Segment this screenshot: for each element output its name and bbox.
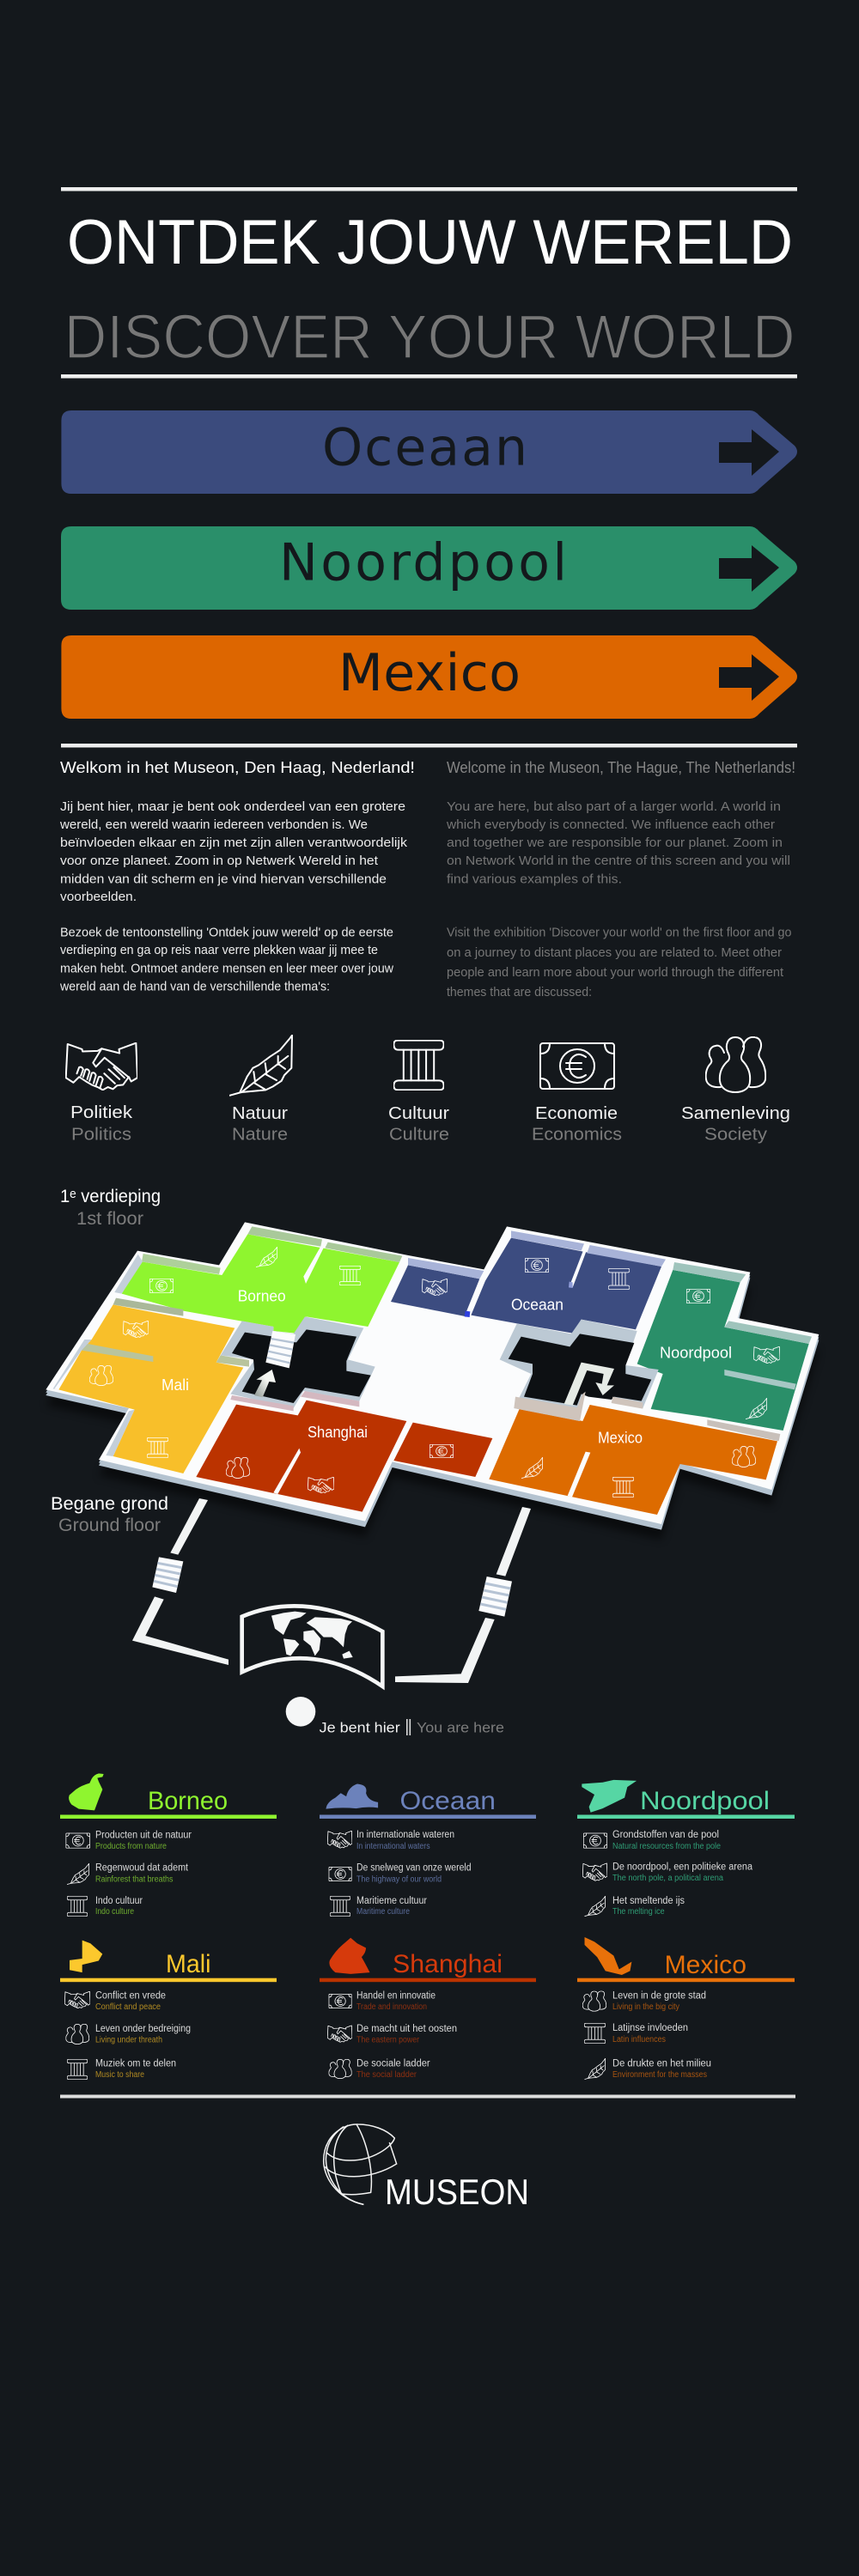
panel: Borneo: Regenwoud dat ademt [95, 1863, 189, 1874]
header block [61, 187, 797, 378]
logo: Museon [324, 2124, 529, 2212]
intro text Dutch: midden van dit scherm en je vind hiervan verschillende [60, 872, 387, 886]
ground floor route and map [132, 1498, 531, 1686]
theme: Economie: Economie [535, 1104, 618, 1123]
panel: Shanghai: De sociale ladder [356, 2058, 430, 2069]
you are here label: Je bent hier [320, 1720, 400, 1736]
panel: Shanghai: Trade and innovation [356, 2002, 427, 2012]
sign: Oceaan: Oceaan [322, 418, 527, 478]
room labels: Noordpool [660, 1345, 732, 1362]
panel: Shanghai [320, 1938, 536, 2080]
east route [395, 1507, 531, 1683]
panel: Shanghai: Shanghai [393, 1950, 503, 1978]
panel: Noordpool [577, 1780, 795, 1917]
theme: Natuur [230, 1036, 292, 1145]
panel: Noordpool: Het smeltende ijs [612, 1896, 685, 1906]
you are here label: You are here [417, 1720, 504, 1736]
silhouette: Noordpool [582, 1780, 637, 1813]
theme: Politiek: Politics [71, 1126, 131, 1145]
intro text Dutch: Jij bent hier, maar je bent ook onderdeel van een grotere [60, 799, 405, 814]
intro text English: find various examples of this. [447, 872, 622, 886]
panel: Mali: Mali [166, 1950, 211, 1978]
room: Shanghai east [393, 1423, 492, 1477]
arrow icon [719, 429, 779, 476]
intro text English: Welcome in the Museon, The Hague, The Netherlands! [447, 759, 795, 776]
sign: Mexico [61, 635, 797, 719]
panel: Borneo: Indo culture [95, 1907, 134, 1917]
room: Mexico [489, 1405, 777, 1515]
intro text Dutch: voorbeelden. [60, 890, 137, 904]
panel: Mexico: De drukte en het milieu [612, 2058, 711, 2069]
panel: Shanghai: Handel en innovatie [356, 1990, 436, 2001]
west route [132, 1498, 228, 1665]
panel: Borneo: Rainforest that breaths [95, 1874, 174, 1884]
intro text Dutch: maken hebt. Ontmoet andere mensen en leer meer over jouw [60, 962, 393, 976]
room labels [161, 1288, 732, 1447]
you are here label [320, 1719, 504, 1736]
sign: Oceaan [61, 410, 797, 494]
silhouette: Shanghai [329, 1938, 370, 1974]
panel: Mexico [577, 1937, 795, 2080]
intro text Dutch: voor onze planeet. Zoom in op Netwerk Wereld in het [60, 854, 379, 868]
label: ground floor [51, 1494, 168, 1535]
panel: Oceaan: The highway of our world [356, 1874, 442, 1884]
silhouette: Mexico [585, 1937, 631, 1975]
panel: Mali: Conflict and peace [95, 2002, 161, 2012]
panel: Noordpool: Grondstoffen van de pool [612, 1830, 719, 1840]
intro text Dutch: Bezoek de tentoonstelling 'Ontdek jouw wereld' op de eerste [60, 926, 393, 939]
title English: DISCOVER YOUR WORLD [64, 303, 795, 372]
panel: Oceaan: In internationale wateren [356, 1830, 454, 1840]
intro text Dutch: wereld aan de hand van de verschillende thema's: [59, 979, 330, 994]
panel: Oceaan: In international waters [356, 1842, 430, 1851]
panel: Shanghai: De macht uit het oosten [356, 2024, 457, 2034]
arrow icon [719, 654, 779, 701]
panel: Borneo: Products from nature [95, 1842, 167, 1851]
panel: Mexico: Environment for the masses [612, 2070, 707, 2080]
intro text English: on Network World in the centre of this screen and you will [447, 854, 790, 868]
panel: Oceaan [320, 1783, 536, 1917]
room labels: Oceaan [511, 1297, 564, 1314]
panel: Oceaan: Oceaan [400, 1787, 496, 1815]
panel: Borneo [60, 1773, 277, 1917]
stairs [265, 1331, 295, 1368]
stairwell west [216, 1316, 375, 1411]
theme: Cultuur [388, 1041, 449, 1145]
theme: Natuur: Nature [232, 1126, 288, 1145]
silhouette: Mali [70, 1941, 102, 1972]
panel: Noordpool: De noordpool, een politieke arena [612, 1862, 753, 1872]
panel: Shanghai: The eastern power [356, 2036, 420, 2045]
intro text Dutch [59, 759, 415, 994]
floor plan: first floor [46, 1222, 819, 1540]
label: first floor: 1st floor [76, 1209, 143, 1229]
intro text English: Visit the exhibition 'Discover your world' on the first floor and go [447, 926, 792, 939]
panel: Noordpool: Natural resources from the pole [612, 1842, 721, 1851]
room: Shanghai [196, 1400, 406, 1512]
theme: Cultuur: Cultuur [388, 1104, 449, 1123]
intro text English: people and learn more about your world through the different [447, 965, 784, 980]
intro text Dutch: Welkom in het Museon, Den Haag, Nederland! [60, 759, 415, 776]
interior wall faces [53, 1226, 812, 1497]
panel: Mali: Music to share [95, 2070, 144, 2080]
theme: Cultuur: Culture [389, 1126, 449, 1145]
panel: Mexico: Leven in de grote stad [612, 1990, 706, 2001]
theme: Natuur: Natuur [232, 1104, 288, 1123]
room: Oceaan west [391, 1265, 479, 1316]
intro text Dutch: beïnvloeden elkaar en zijn met zijn allen verantwoordelijk [60, 835, 408, 850]
logo: Museon: MUSEON [385, 2172, 529, 2212]
intro text Dutch: wereld, een wereld waarin iedereen verbonden is. We [59, 817, 368, 832]
panel: Mali: Leven onder bedreiging [95, 2024, 191, 2034]
room labels: Shanghai [308, 1424, 368, 1441]
intro text English [446, 759, 795, 999]
stairwell east [500, 1320, 659, 1421]
panel: Noordpool: Noordpool [640, 1787, 770, 1815]
silhouette: Borneo [69, 1773, 104, 1810]
sign: Noordpool: Noordpool [279, 532, 567, 592]
panel: Mexico: Latijnse invloeden [612, 2023, 688, 2033]
sign: Noordpool [61, 526, 797, 610]
theme: Politiek [66, 1043, 137, 1145]
panel: Mali: Living under threath [95, 2036, 162, 2045]
intro text English: on a journey to distant places you are related to. Meet other [447, 945, 782, 960]
theme: Economie: Economics [532, 1126, 622, 1145]
label: ground floor: Ground floor [58, 1516, 161, 1535]
intro text English: and together we are responsible for our planet. Zoom in [447, 835, 783, 850]
panel: Oceaan: Maritime culture [356, 1907, 410, 1917]
theme: Politiek: Politiek [70, 1103, 133, 1122]
you are here marker [286, 1697, 315, 1727]
panel: Borneo: Indo cultuur [95, 1896, 143, 1906]
arrow route [564, 1363, 614, 1406]
sign: Mexico: Mexico [338, 643, 521, 703]
room: Noordpool [637, 1270, 809, 1431]
room labels: Mexico [598, 1430, 643, 1447]
panel: Mexico: Living in the big city [612, 2002, 679, 2012]
room: Borneo [122, 1234, 399, 1334]
panel: Mali: Conflict en vrede [95, 1990, 166, 2001]
panel: Mali: Muziek om te delen [95, 2058, 176, 2069]
intro text English: themes that are discussed: [447, 985, 592, 999]
theme: Samenleving: Samenleving [681, 1104, 790, 1123]
world map screen [242, 1606, 382, 1686]
panel: Oceaan: De snelweg van onze wereld [356, 1863, 471, 1874]
panel: Noordpool: The melting ice [612, 1907, 665, 1917]
room labels: Mali [161, 1376, 189, 1394]
room: Oceaan [471, 1238, 661, 1334]
panel: Borneo: Producten uit de natuur [95, 1831, 192, 1841]
label: first floor: 1ᵉ verdieping [60, 1187, 161, 1206]
globe [324, 2124, 397, 2204]
panel: Oceaan: Maritieme cultuur [356, 1896, 427, 1906]
silhouette: wave [326, 1783, 378, 1809]
title Dutch: ONTDEK JOUW WERELD [67, 208, 793, 277]
arrow icon [719, 545, 779, 592]
panel: Borneo: Borneo [148, 1787, 228, 1815]
label: ground floor: Begane grond [51, 1494, 168, 1514]
theme: Samenleving [681, 1037, 790, 1145]
panel: Shanghai: The social ladder [356, 2070, 417, 2080]
panel: Noordpool: The north pole, a political arena [612, 1874, 723, 1883]
intro text Dutch: verdieping en ga op reis naar verre plekken waar jij mee te [60, 943, 378, 957]
room: Mali [58, 1304, 243, 1473]
panel: Mali [60, 1941, 277, 2080]
label: first floor [60, 1187, 161, 1229]
arrow up [254, 1370, 276, 1397]
room icons [89, 1247, 780, 1498]
room labels: Borneo [238, 1288, 286, 1305]
theme: Samenleving: Society [704, 1126, 767, 1145]
panel: Mexico: Latin influences [612, 2035, 666, 2044]
theme: Economie [532, 1043, 622, 1145]
intro text English: which everybody is connected. We influence each other [446, 817, 775, 832]
panel: Mexico: Mexico [665, 1951, 746, 1979]
intro text English: You are here, but also part of a larger world. A world in [447, 799, 781, 814]
